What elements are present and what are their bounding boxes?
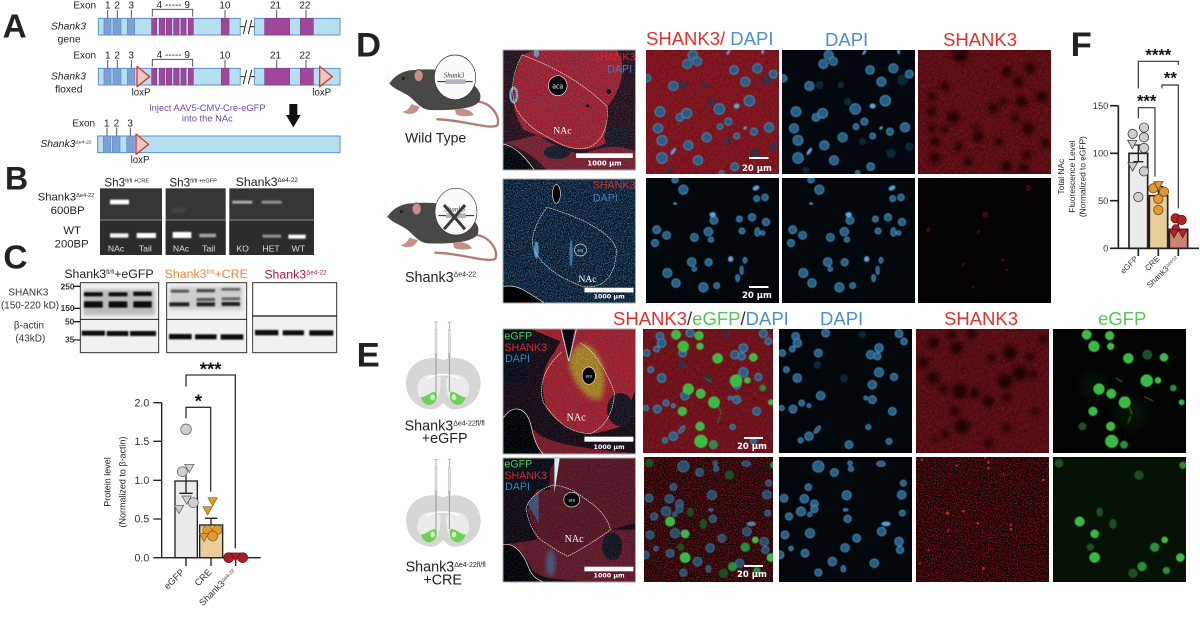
- significance stars: [195, 358, 222, 411]
- Shank3 floxed track: 3: [128, 50, 134, 61]
- micrograph E bottom: SHANK3: [916, 456, 1049, 582]
- western blot headers: Δe4-22: [306, 269, 327, 276]
- x labels: [1119, 254, 1181, 290]
- significance stars: *: [195, 390, 203, 411]
- error bars: [179, 475, 217, 525]
- molecular weight markers: [61, 281, 80, 345]
- slice D bottom: Shank3 delta: aca: [578, 248, 583, 253]
- gel labels left: [38, 191, 94, 250]
- western blot labels: (43kD): [15, 334, 45, 345]
- CRE data points: [1149, 182, 1169, 215]
- gel labels left: WT: [63, 225, 81, 237]
- axes and ticks: [1110, 106, 1199, 256]
- micrograph D bottom: DAPI: [782, 176, 915, 303]
- arrow: down: [286, 104, 301, 127]
- Shank3 floxed track: [51, 50, 340, 99]
- gel: Shank3 delta e4-22: HET: [262, 244, 280, 254]
- Shank3 floxed track: 22: [299, 50, 311, 61]
- slice E top: eGFP: NAc: [567, 413, 586, 424]
- significance stars: [1137, 46, 1177, 111]
- micrograph E bottom: merged: [641, 457, 777, 582]
- panel letter C: C: [3, 239, 27, 276]
- molecular weight markers: 35: [65, 335, 75, 345]
- y tick labels: 0.5: [135, 514, 149, 526]
- panel letter A: A: [3, 8, 27, 45]
- Shank3 delta e4-22 track: loxP: [131, 155, 149, 166]
- Shank3 gene track: 1: [105, 1, 111, 12]
- eGFP data points: [174, 424, 198, 514]
- blot: eGFP group: [80, 283, 159, 353]
- panel letter D: D: [356, 27, 381, 65]
- column headings E: [613, 308, 1146, 329]
- Shank3 floxed track: floxed: [55, 84, 83, 95]
- column headings D: SHANK3: [943, 29, 1017, 50]
- slice D bottom: Shank3 delta: NAc: [578, 274, 597, 285]
- x labels: Δe4-22: [1165, 254, 1178, 268]
- Shank3 gene track: gene: [58, 34, 81, 45]
- label Shank3 eGFP: +eGFP: [422, 431, 468, 447]
- micrograph E top: eGFP: [1053, 329, 1186, 453]
- Shank3 delta label: Shank3: [405, 270, 454, 286]
- gel labels left: 200BP: [55, 238, 89, 250]
- gel labels left: Shank3: [38, 191, 76, 203]
- gel: Sh3 fl/fl +eGFP: Tail: [202, 244, 215, 254]
- micrograph D top: merged: [644, 49, 779, 175]
- Shank3 gene track: [51, 0, 340, 45]
- y tick labels: 2.0: [135, 397, 149, 409]
- panel E left: [357, 322, 486, 588]
- wild type label: Wild Type: [405, 130, 466, 146]
- Shank3 delta e4-22 track: Shank3: [40, 139, 75, 150]
- knockout mouse with crossed Shank3 inset: [383, 188, 496, 260]
- x labels: eGFP: [162, 567, 186, 591]
- y tick labels: 0.0: [135, 552, 149, 564]
- y tick labels: [135, 397, 149, 564]
- scale bar 20 um: 20 µm: [737, 442, 767, 452]
- label Shank3 eGFP: Shank3: [405, 418, 453, 434]
- slice D top: wild type: aca: [552, 81, 564, 90]
- panel F: fluorescence level chart: [1056, 26, 1199, 290]
- significance stars: ***: [200, 358, 222, 379]
- slice E bottom: CRE: DAPI: [505, 481, 530, 493]
- injection note: Inject AAV5-CMV-Cre-eGFP: [149, 103, 266, 113]
- western blot headers: +CRE: [215, 267, 248, 281]
- knockout mouse with crossed Shank3 inset: Shank3: [444, 205, 465, 213]
- gel headers: fl/fl +CRE: [125, 179, 149, 185]
- y axis title: (Normalized to eGFP): [1078, 136, 1088, 217]
- slice E bottom: CRE: SHANK3: [504, 470, 547, 482]
- Shank3 gene track: 4 ----- 9: [157, 0, 190, 11]
- blot: Shank3 delta group: [253, 283, 337, 353]
- gel: Sh3 fl/fl +eGFP: [166, 188, 226, 255]
- Shank3 floxed track: Shank3: [51, 71, 86, 82]
- y axis title: Total NAc: [1056, 159, 1066, 194]
- western blot headers: +eGFP: [114, 267, 154, 281]
- western blot labels: (150-220 kD): [1, 301, 59, 312]
- y tick labels: 0: [1103, 244, 1108, 254]
- Shank3 floxed track: loxP: [132, 88, 150, 99]
- bars: [1129, 153, 1188, 248]
- scale bar 20 um: 20 µm: [737, 570, 767, 580]
- Shank3 floxed track: 1: [105, 50, 111, 61]
- Shank3 gene track: Shank3: [51, 21, 86, 32]
- significance brackets: [186, 375, 235, 548]
- x labels: [162, 567, 238, 608]
- Shank3 delta label: Δe4-22: [454, 272, 476, 279]
- Shank3 gene track: 10: [219, 1, 231, 12]
- column headings D: DAPI: [825, 29, 868, 50]
- label Shank3 CRE: Shank3: [406, 560, 454, 576]
- Shank3 delta e4-22 track: Δe4-22: [74, 139, 92, 145]
- slice E top: eGFP: eGFP: [504, 331, 532, 343]
- slice E top: eGFP: aca: [586, 375, 592, 380]
- panel letter B: B: [5, 160, 28, 196]
- slice D top: wild type: SHANK3: [593, 52, 635, 64]
- gel: Shank3 delta e4-22: KO: [236, 244, 249, 254]
- label Shank3 CRE: +CRE: [423, 572, 462, 588]
- western blot headers: fl/fl: [206, 269, 215, 276]
- y axis title: Protein level: [103, 457, 113, 507]
- column headings E: eGFP: [1098, 308, 1146, 329]
- CRE data points: [199, 498, 222, 542]
- eGFP data points: [1128, 123, 1149, 202]
- western blot headers: Shank3: [64, 267, 106, 281]
- slice D bottom: Shank3 delta: DAPI: [593, 193, 618, 205]
- slice E top: eGFP: DAPI: [505, 353, 530, 365]
- gel headers: Shank3: [236, 175, 277, 189]
- western blot headers: fl/fl: [106, 269, 114, 276]
- Shank3 gene track: Exon: [73, 1, 96, 12]
- Shank3 gene track: 3: [128, 1, 134, 12]
- micrograph D bottom: SHANK3: [918, 178, 1051, 303]
- icon: coronal brain with syringes, CRE: [406, 459, 481, 547]
- Shank3 delta e4-22 track: 3: [127, 118, 133, 129]
- slice D top: wild type: 1000 µm: [587, 159, 622, 167]
- molecular weight markers: 150: [61, 303, 75, 313]
- label Shank3 eGFP: Δe4-22fl/fl: [453, 421, 485, 428]
- Shank3 gene track: 2: [114, 1, 120, 12]
- y tick labels: 100: [1093, 149, 1108, 159]
- y tick labels: [1093, 101, 1108, 254]
- gel labels left: Δe4-22: [76, 193, 94, 199]
- bars: [175, 481, 223, 558]
- significance stars: ****: [1145, 46, 1172, 65]
- panel D left: mouse cartoons: [356, 27, 498, 286]
- x labels: Δe4-22: [221, 568, 236, 584]
- column headings E: SHANK3: [944, 308, 1018, 329]
- panel B and C blots: [1, 160, 337, 353]
- Shank3 gene track: 21: [270, 1, 282, 12]
- gel headers: Sh3: [169, 177, 190, 190]
- slice D top: wild type: DAPI: [607, 64, 632, 76]
- x labels: Shank3: [197, 578, 227, 608]
- gel: Shank3 delta e4-22: [229, 188, 314, 255]
- significance brackets: [1138, 61, 1178, 208]
- Shank3 delta e4-22 track: [40, 118, 340, 166]
- column headings E: DAPI: [820, 308, 863, 329]
- slice D bottom: Shank3 delta: 1000 µm: [594, 294, 625, 301]
- western blot headers: [64, 267, 327, 281]
- column headings D: SHANK3/ DAPI: [646, 28, 774, 49]
- micrograph E top: SHANK3: [916, 329, 1049, 453]
- injection note: into the NAc: [182, 114, 233, 124]
- gel: Sh3 fl/fl +CRE: [100, 188, 162, 255]
- icon: coronal brain with syringes, eGFP: [406, 322, 481, 409]
- significance stars: ***: [1137, 92, 1157, 111]
- micrograph D top: SHANK3: [918, 48, 1051, 174]
- significance stars: **: [1164, 68, 1177, 87]
- x labels: CRE: [1143, 254, 1161, 273]
- western blot labels: [1, 288, 59, 345]
- Shank3 floxed track: 2: [114, 50, 120, 61]
- Shank3 floxed track: loxP: [312, 88, 331, 99]
- blot: CRE group: [167, 283, 247, 353]
- scale bar 20 um: 20 µm: [742, 291, 772, 301]
- chart C: protein level bar chart: [103, 358, 261, 608]
- slice E top: eGFP: [503, 329, 636, 455]
- Shank3 floxed track: 10: [219, 50, 231, 61]
- label Shank3 CRE: Δe4-22fl/fl: [454, 562, 486, 569]
- y tick labels: 50: [1098, 196, 1108, 206]
- scale bar 20 um: 20 µm: [742, 164, 772, 174]
- x labels: eGFP: [1119, 254, 1140, 275]
- slice E bottom: CRE: NAc: [565, 534, 584, 545]
- micrograph E top: DAPI: [779, 329, 912, 453]
- Shank3 gene track: 22: [299, 1, 311, 12]
- micrograph E top: merged: [643, 329, 774, 453]
- Shank3 delta data points: [224, 553, 248, 563]
- micrograph E bottom: DAPI: [776, 457, 912, 582]
- Shank3 delta e4-22 track: 2: [114, 118, 120, 129]
- micrograph D top: DAPI: [780, 49, 915, 175]
- Shank3 delta e4-22 track: 1: [104, 118, 110, 129]
- panel letter E: E: [357, 337, 380, 375]
- micrograph D bottom: merged: [646, 176, 779, 303]
- gel headers: fl/fl +eGFP: [190, 179, 217, 185]
- wild type mouse with Shank3 inset: [385, 55, 498, 127]
- gel: Shank3 delta e4-22: WT: [292, 244, 306, 254]
- slice E bottom: CRE: eGFP: [504, 459, 532, 471]
- Shank3 floxed track: Exon: [73, 50, 96, 61]
- gel: Sh3 fl/fl +CRE: NAc: [108, 244, 125, 254]
- gel headers: [104, 175, 298, 190]
- micrograph E bottom: eGFP: [1053, 457, 1187, 582]
- slice D top: wild type: [503, 49, 636, 170]
- Shank3 floxed track: 21: [270, 50, 282, 61]
- axes and ticks: [153, 403, 261, 566]
- Shank3 floxed track: 4 ----- 9: [157, 50, 190, 61]
- slice D top: wild type: NAc: [553, 125, 572, 136]
- error bars: [1133, 145, 1178, 229]
- slice E top: eGFP: SHANK3: [504, 342, 547, 354]
- x labels: Shank3: [1145, 264, 1171, 290]
- Shank3 delta data points: [1169, 214, 1187, 238]
- slice E top: eGFP: 1000 µm: [594, 444, 625, 451]
- slice E bottom: CRE: 1000 µm: [594, 572, 625, 579]
- wild type mouse with Shank3 inset: Shank3: [444, 71, 465, 79]
- column headings D: [646, 28, 1017, 50]
- gel headers: Sh3: [104, 177, 125, 190]
- panel A: Shank3 gene constructs: [3, 0, 340, 166]
- gel: Sh3 fl/fl +eGFP: NAc: [173, 244, 190, 254]
- western blot headers: Shank3: [165, 267, 206, 281]
- gel: Sh3 fl/fl +CRE: Tail: [139, 244, 152, 254]
- x labels: CRE: [193, 567, 214, 588]
- y axis title: Fluorescence Level: [1067, 140, 1077, 213]
- slice D bottom: Shank3 delta: SHANK3: [593, 179, 636, 191]
- column headings E: SHANK3/eGFP/DAPI: [613, 308, 789, 329]
- slice E bottom: CRE: [503, 458, 636, 582]
- western blot labels: β-actin: [14, 320, 44, 331]
- western blot headers: Shank3: [264, 267, 306, 281]
- gel headers: Δe4-22: [277, 177, 298, 184]
- panel letter F: F: [1071, 26, 1092, 64]
- y tick labels: 1.5: [135, 436, 149, 448]
- Shank3 delta e4-22 track: Exon: [72, 118, 95, 129]
- slice E bottom: CRE: aca: [569, 498, 575, 503]
- y axis title: (Normalized to β-actin): [117, 436, 127, 528]
- western blot labels: SHANK3: [8, 288, 49, 299]
- molecular weight markers: 250: [61, 281, 75, 291]
- gel labels left: 600BP: [51, 205, 85, 217]
- molecular weight markers: 50: [65, 316, 75, 326]
- y tick labels: 150: [1093, 101, 1108, 111]
- slice D bottom: Shank3 delta: [503, 179, 636, 303]
- y tick labels: 1.0: [135, 475, 149, 487]
